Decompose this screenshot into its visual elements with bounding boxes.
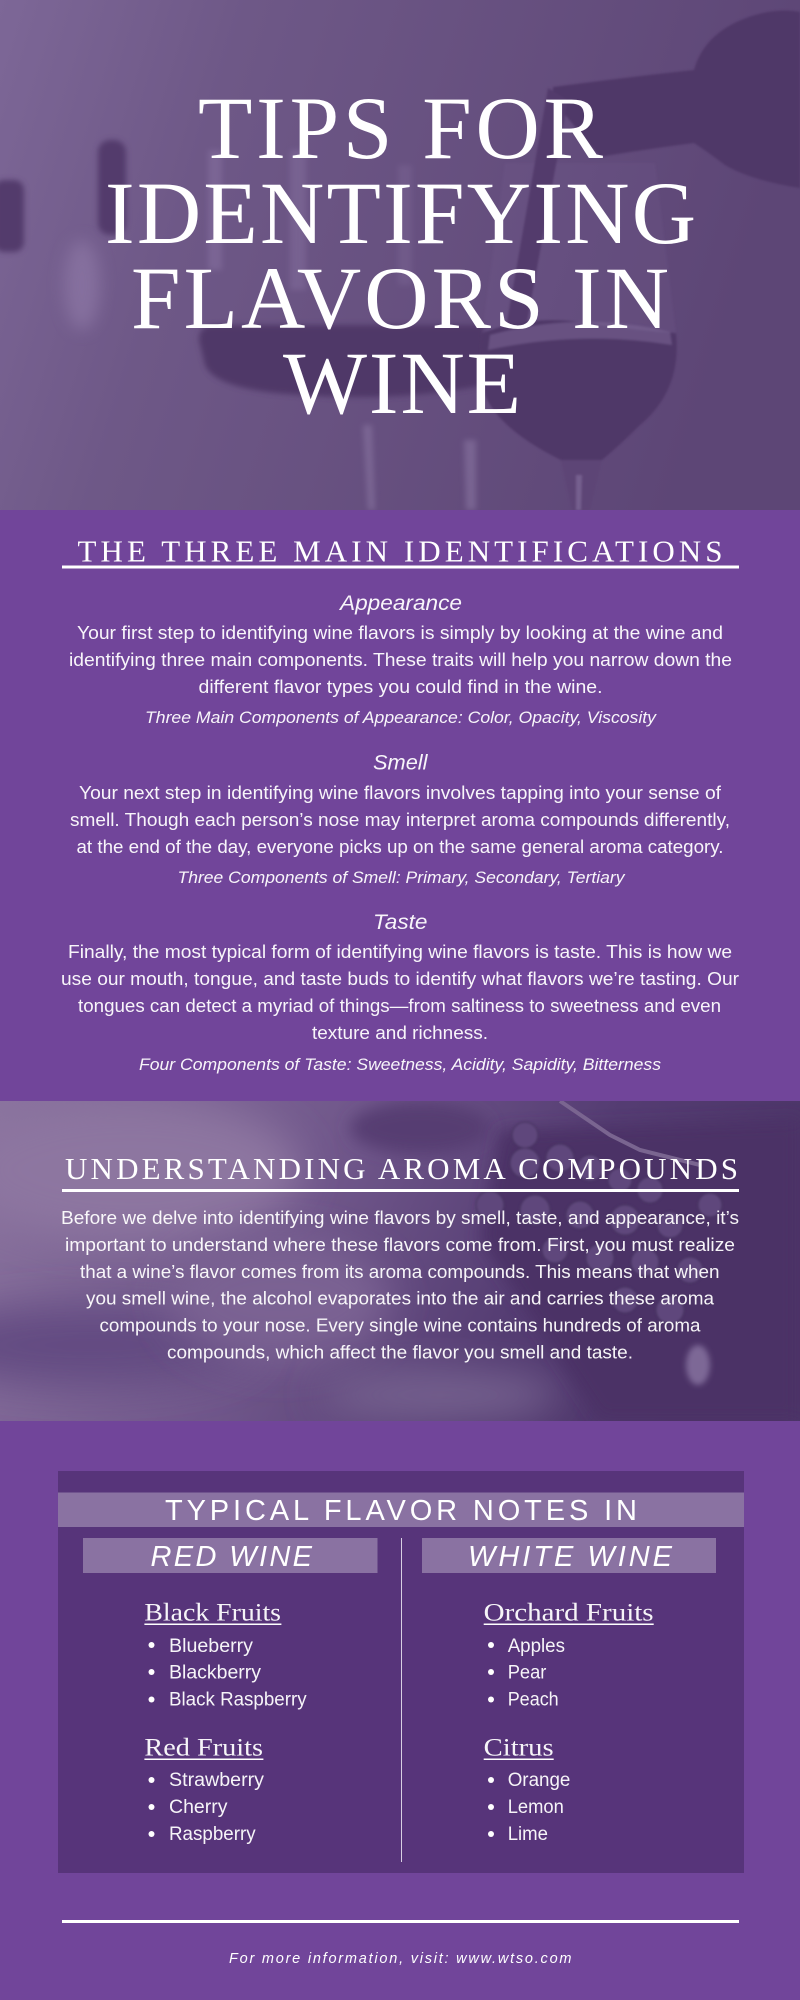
block: appearance <box>69 591 732 727</box>
column header: white wine: WHITE WINE <box>468 1541 673 1573</box>
block: appearance: Three Main Components of Appearance: Color, Opacity, Viscosity <box>145 709 658 727</box>
block: taste: Four Components of Taste: Sweetness, Acidity, Sapidity, Bitterness <box>139 1056 661 1074</box>
panel: hero header <box>0 0 800 510</box>
title: FLAVORS IN <box>131 250 669 348</box>
list: orchard fruits: Apples <box>508 1636 565 1657</box>
text block: aroma explanation <box>61 1207 739 1362</box>
block: taste: texture and richness. <box>312 1022 488 1043</box>
block: appearance: Your first step to identifying wine flavors is simply by looking at the wine and <box>77 622 723 643</box>
list: orchard fruits: Peach <box>508 1690 559 1710</box>
block: appearance: identifying three main components. These traits will help you narrow down the <box>69 649 732 670</box>
list: orchard fruits <box>484 1600 654 1710</box>
list: black fruits: Blueberry <box>169 1636 254 1657</box>
block: taste: tongues can detect a myriad of things—from saltiness to sweetness and even <box>78 995 721 1016</box>
block: smell: at the end of the day, everyone picks up on the same general aroma category. <box>76 836 724 857</box>
list: red fruits: Cherry <box>169 1797 228 1818</box>
block: smell <box>70 750 730 887</box>
block: appearance: Appearance <box>338 591 462 615</box>
list: red fruits: Raspberry <box>169 1824 256 1845</box>
block: appearance: different flavor types you could find in the wine. <box>198 676 602 697</box>
list: citrus: Orange <box>508 1770 570 1791</box>
text block: aroma explanation: compounds to your nose. Every single wine contains hundreds of aroma <box>100 1314 701 1336</box>
column header: white wine <box>422 1538 716 1573</box>
block: taste: Finally, the most typical form of identifying wine flavors is taste. This is how we <box>68 941 732 962</box>
list: red fruits: Strawberry <box>169 1770 265 1791</box>
block: smell: smell. Though each person’s nose may interpret aroma compounds differently, <box>70 809 730 830</box>
title: TIPS FOR <box>198 80 604 178</box>
list: citrus: Lemon <box>508 1797 564 1818</box>
panel: understanding aroma compounds <box>0 1100 800 1421</box>
block: taste: Taste <box>373 910 428 934</box>
text block: aroma explanation: you smell wine, the alcohol evaporates into the air and carries these aroma <box>86 1288 715 1308</box>
list: black fruits: Blackberry <box>169 1662 262 1684</box>
list: citrus: Lime <box>508 1824 548 1845</box>
list: black fruits: Black Fruits <box>144 1600 281 1626</box>
title: WINE <box>283 335 521 433</box>
text block: aroma explanation: that a wine’s flavor comes from its aroma compounds. This means that when <box>80 1261 720 1282</box>
list: black fruits <box>144 1600 307 1710</box>
block: taste: use our mouth, tongue, and taste buds to identify what flavors we’re tasting. Our <box>61 968 739 989</box>
block: smell: Smell <box>373 750 429 774</box>
column header: red wine <box>83 1538 378 1573</box>
list: black fruits: Black Raspberry <box>169 1690 307 1710</box>
background photo: grapes on the vine <box>0 1100 800 1421</box>
text block: aroma explanation: important to understand where these flavors come from. First, you must realize <box>65 1234 735 1255</box>
title bar: typical flavor notes in <box>58 1492 744 1527</box>
heading: understanding aroma compounds: UNDERSTANDING AROMA COMPOUNDS <box>65 1151 738 1186</box>
column header: red wine: RED WINE <box>150 1541 313 1573</box>
heading: three main identifications: THE THREE MAIN IDENTIFICATIONS <box>78 534 723 568</box>
text block: aroma explanation: compounds, which affect the flavor you smell and taste. <box>167 1342 633 1362</box>
title: IDENTIFYING <box>105 165 696 263</box>
title bar: typical flavor notes in: TYPICAL FLAVOR NOTES IN <box>165 1495 637 1527</box>
list: red fruits: Red Fruits <box>144 1734 263 1762</box>
block: taste <box>61 910 739 1074</box>
title <box>105 80 696 433</box>
block: smell: Your next step in identifying wine flavors involves tapping into your sense of <box>79 782 722 803</box>
list: red fruits <box>144 1734 265 1845</box>
panel: typical flavor notes <box>58 1471 744 1873</box>
panel: the three main identifications <box>61 534 739 1074</box>
list: citrus <box>484 1734 570 1845</box>
block: smell: Three Components of Smell: Primary, Secondary, Tertiary <box>178 869 626 887</box>
list: orchard fruits: Pear <box>508 1662 547 1684</box>
text block: aroma explanation: Before we delve into identifying wine flavors by smell, taste, and appearance, it’s <box>61 1207 739 1228</box>
hero photo: wine poured into glasses <box>0 0 800 510</box>
list: citrus: Citrus <box>484 1734 554 1762</box>
footer source note: For more information, visit: www.wtso.com <box>229 1951 572 1967</box>
list: orchard fruits: Orchard Fruits <box>484 1600 654 1626</box>
